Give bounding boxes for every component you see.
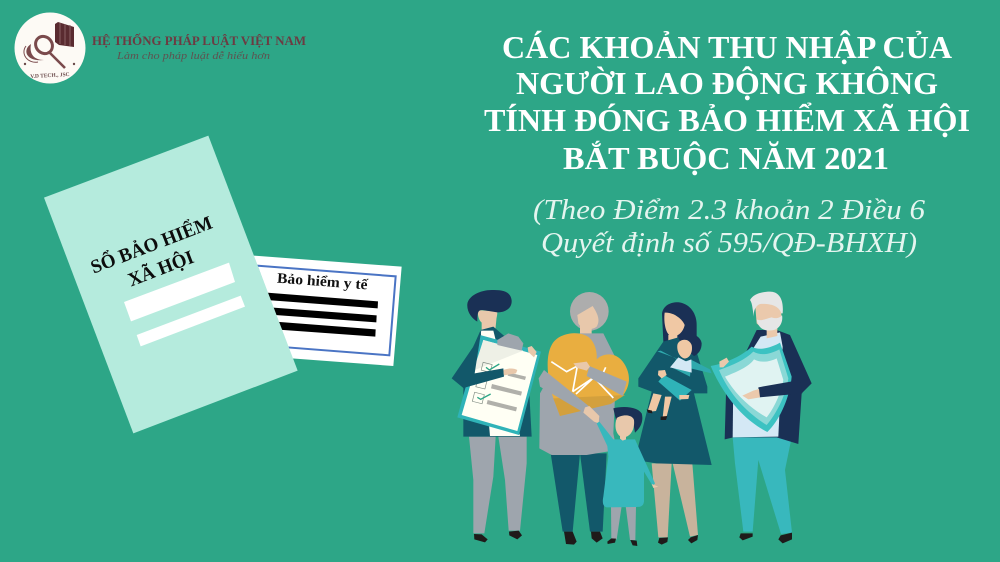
health insurance card xyxy=(250,255,402,366)
person: mother with baby xyxy=(635,302,712,545)
logo slogan: Làm cho pháp luật dễ hiểu hơn xyxy=(116,50,271,62)
subtitle xyxy=(533,195,925,259)
logo badge xyxy=(14,12,86,84)
logo name: HỆ THỐNG PHÁP LUẬT VIỆT NAM xyxy=(92,33,306,48)
title xyxy=(484,29,970,176)
person: grandmother with heart xyxy=(539,292,629,545)
logo badge: V.D TECH., JSC xyxy=(30,72,70,80)
subtitle: Quyết định số 595/QĐ-BHXH) xyxy=(541,228,917,259)
person: child in teal xyxy=(597,407,658,546)
family illustration xyxy=(452,290,812,546)
title: CÁC KHOẢN THU NHẬP CỦA xyxy=(502,29,952,65)
title: TÍNH ĐÓNG BẢO HIỂM XÃ HỘI xyxy=(484,102,970,138)
card title: Bảo hiểm y tế xyxy=(276,271,370,294)
book fields xyxy=(124,263,235,321)
title: NGƯỜI LAO ĐỘNG KHÔNG xyxy=(516,65,938,101)
person: grandfather with shield xyxy=(711,292,812,543)
card lines xyxy=(267,293,378,337)
book title: XÃ HỘI xyxy=(125,246,197,291)
subtitle: (Theo Điểm 2.3 khoản 2 Điều 6 xyxy=(533,195,925,226)
title: BẮT BUỘC NĂM 2021 xyxy=(563,140,889,176)
person: man with clipboard xyxy=(452,290,541,542)
book title: SỔ BẢO HIỂM xyxy=(88,212,216,278)
social insurance book xyxy=(44,136,298,433)
logo: Hệ thống pháp luật Việt Nam xyxy=(14,12,306,84)
